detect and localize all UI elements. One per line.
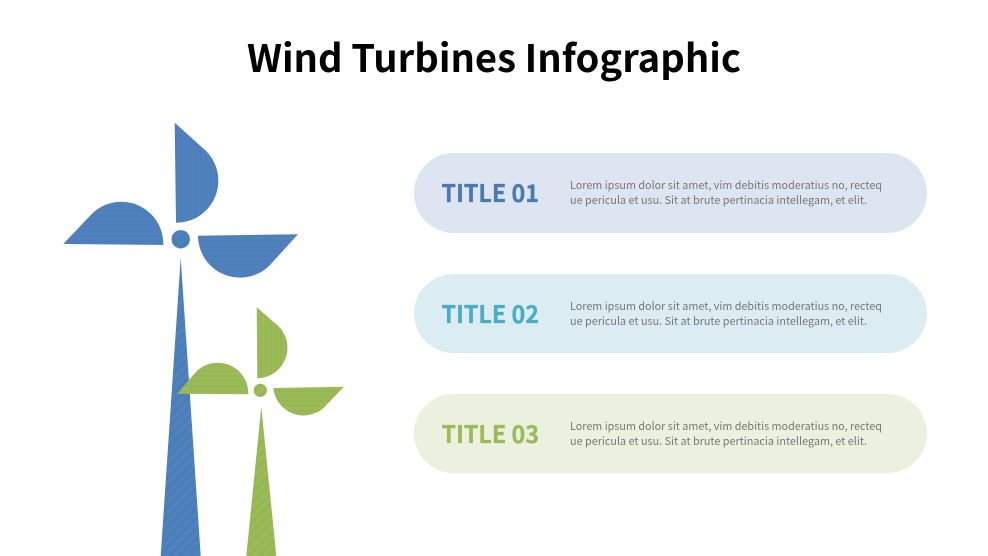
panel: title 03	[414, 394, 927, 473]
panel: title 01	[414, 153, 927, 233]
body text 02: Lorem ipsum dolor sit amet, vim debitis moderatius no, recteq	[570, 298, 882, 314]
panel: title 02	[414, 274, 927, 353]
blue tower	[161, 258, 201, 556]
body text 02: ue pericula et usu. Sit at brute pertinacia intellegam, et elit.	[570, 313, 867, 329]
green left blade	[177, 363, 248, 394]
green hub	[254, 384, 267, 397]
blue wind turbine	[63, 123, 298, 556]
green wind turbine	[177, 307, 344, 556]
body text 01: Lorem ipsum dolor sit amet, vim debitis moderatius no, recteq	[570, 177, 882, 193]
green right blade	[273, 387, 344, 415]
body text 02	[570, 298, 882, 329]
heading 02: TITLE 02	[442, 296, 539, 331]
body text 01	[570, 177, 882, 208]
heading 03: TITLE 03	[442, 416, 539, 451]
body text 03: Lorem ipsum dolor sit amet, vim debitis moderatius no, recteq	[570, 418, 882, 434]
pill background 01	[414, 153, 927, 233]
blue right blade	[198, 234, 298, 278]
heading 01: TITLE 01	[442, 175, 539, 210]
body text 01: ue pericula et usu. Sit at brute pertinacia intellegam, et elit.	[570, 192, 867, 208]
blue hub	[172, 230, 190, 248]
green top blade	[257, 307, 287, 378]
pill background 02	[414, 274, 927, 353]
blue top blade	[175, 123, 218, 223]
body text 03: ue pericula et usu. Sit at brute pertinacia intellegam, et elit.	[570, 433, 867, 449]
pill background 03	[414, 394, 927, 473]
title: Wind Turbines Infographic	[247, 28, 741, 83]
blue left blade	[63, 202, 163, 245]
green tower	[246, 407, 276, 556]
body text 03	[570, 418, 882, 449]
